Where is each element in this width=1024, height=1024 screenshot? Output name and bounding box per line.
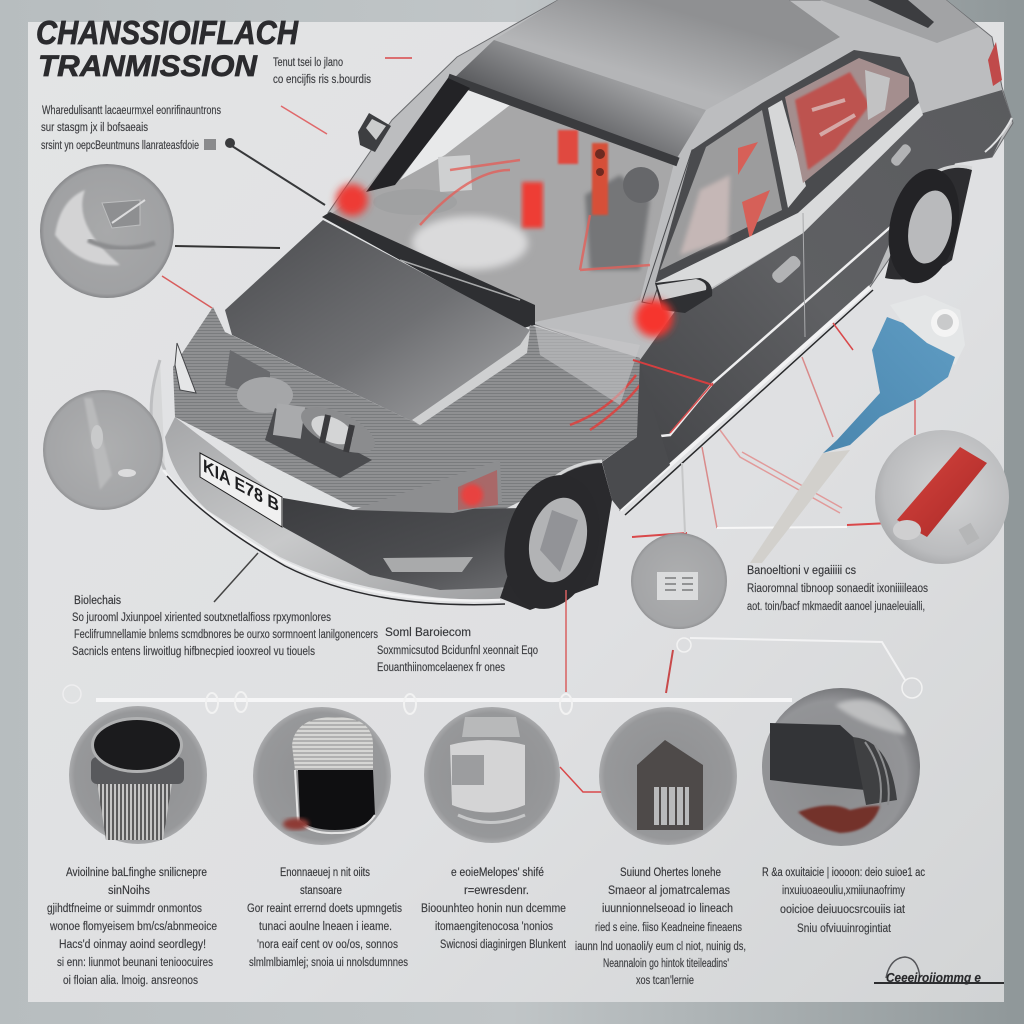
car: interior dark seat — [585, 175, 650, 270]
text block: right: Banoeltioni v egaiiiii cs — [747, 565, 856, 577]
text block: intro: srsint yn oepcBeuntmuns llanrateasfdoie — [41, 140, 199, 152]
car: silver belt strip — [655, 103, 923, 288]
car: red wires right of mesh — [570, 375, 640, 430]
car: lip edge lines — [163, 470, 500, 600]
text block: left lower: Feclifrumnellamie bnlems scmdbnores be ourxo sormnoent lanilgonencers — [74, 629, 378, 641]
car: window pillar — [768, 100, 806, 208]
callout text: top — [273, 57, 371, 86]
bottom column 4 text: Neannaloin go hintok titeileadins' — [603, 958, 729, 970]
car: right headlight — [353, 460, 502, 513]
text block: intro — [41, 105, 221, 152]
bottom column 2 text: Gor reaint errernd doets upmngetis — [247, 903, 402, 915]
car: front wheel — [491, 461, 613, 619]
icon circle: left cylinder — [43, 390, 163, 510]
car: cowl dark band — [322, 212, 535, 328]
car: hood — [225, 220, 530, 425]
icon circle: filter — [69, 706, 207, 844]
car: right side mirror — [655, 278, 712, 313]
bottom column 1 text: sinNoihs — [108, 885, 150, 897]
bottom column 4 text: Smaeor al jomatrcalemas — [608, 885, 730, 897]
bottom column 2 text: 'nora eaif cent ov oo/os, sonnos — [257, 939, 398, 951]
car: silver body silhouette — [328, 0, 1013, 510]
bottom column 2 text: tunaci aoulne lneaen i ieame. — [259, 921, 392, 933]
bottom column 3 text: Swicnosi diaginirgen Blunkent — [440, 939, 567, 951]
icon: funnel tube — [750, 450, 850, 563]
bottom column 3 text: e eoieMelopes' shifé — [451, 867, 544, 879]
title: TRANMISSION — [38, 50, 258, 83]
icon: blue funnel — [823, 317, 955, 453]
car: left mirror — [358, 113, 391, 152]
car: red glow markers — [336, 184, 673, 337]
icon circle: right red cylinder — [875, 430, 1009, 564]
text block: right: Riaoromnal tibnoop sonaedit ixoniiiileaos — [747, 583, 928, 595]
bottom column 3 text: Bioounhteo honin nun dcemme — [421, 903, 566, 915]
bottom column 2 text: stansoare — [300, 885, 342, 897]
bottom column 4 text — [575, 867, 746, 987]
text block: centre lower — [377, 627, 538, 674]
car: fog light — [383, 557, 473, 572]
car: licence plate: KIA E78 B — [203, 456, 279, 517]
car: roof window surround — [655, 50, 919, 283]
bottom column 1 text: gjihdtfneime or suimmdr onmontos — [47, 903, 202, 915]
icon: bottle cap — [890, 295, 965, 365]
text block: left lower — [72, 595, 378, 658]
car: light mesh patch — [535, 325, 640, 405]
car: rear door window — [785, 58, 909, 183]
car: engine — [225, 350, 381, 478]
text block: intro: Wharedulisantt lacaeurmxel eonrifinauntrons — [42, 105, 221, 117]
bottom column 2 text: Enonnaeuej n nit oiits — [280, 867, 370, 879]
text block: centre lower: Soml Baroiecom — [385, 627, 471, 639]
car: rear deck — [820, 0, 979, 43]
text block: left lower: Sacnicls entens lirwoitlug hifbnecpied iooxreol vu tiouels — [72, 646, 315, 658]
bottom column 5 text: ooicioe deiuuocsrcouiis iat — [780, 904, 906, 916]
icon: small clip at intro text — [204, 138, 235, 150]
callout text: top: Tenut tsei lo jlano — [273, 57, 343, 69]
bottom column 5 text: Sniu ofviuuinrogintiat — [797, 923, 892, 935]
icon circle: brake drum — [762, 688, 920, 846]
car: left headlight — [175, 343, 196, 393]
text block: intro: sur stasgm jx il bofsaeais — [41, 122, 148, 134]
logo — [874, 957, 1004, 985]
car: side lines — [622, 223, 895, 440]
text block: centre lower: Eouanthiinomcelaenex fr ones — [377, 662, 505, 674]
leader lines behind car — [162, 58, 412, 602]
bottom column 3 text — [421, 867, 567, 951]
text block: right — [747, 565, 928, 613]
car illustration — [151, 0, 1013, 619]
car: interior red parts — [420, 130, 650, 270]
logo: Ceeeiroiiommg e — [886, 970, 981, 985]
icon circle: clutch housing — [599, 707, 737, 845]
car: interior box — [438, 155, 472, 192]
icon circle: manual — [631, 533, 727, 629]
car: door handles — [770, 254, 803, 285]
text block: left lower: So jurooml Jxiunpoel xiriented soutxnetlalfioss rpxymonlores — [72, 612, 331, 624]
text block: right: aot. toin/bacf mkmaedit aanoel junaeleuialli, — [747, 601, 925, 613]
bottom column 5 text: inxuiuoaeouliu,xmiiunaofrimy — [782, 885, 905, 897]
bottom column 4 text: iuunnionnelseoad io lineach — [602, 903, 733, 915]
car: clear glass window — [400, 88, 510, 180]
bottom column 2 text: slmlmlbiamlej; snoia ui nnolsdumnnes — [249, 957, 408, 969]
title — [36, 14, 299, 83]
car: black A-pillar — [366, 78, 470, 192]
connector line — [63, 638, 922, 714]
bottom column 4 text: ried s eine. fiiso Keadneine fineaens — [595, 922, 742, 934]
car: interior seat — [373, 189, 457, 215]
car: roof front surface — [452, 40, 706, 163]
bottom column 1 text: wonoe flomyeisem bm/cs/abnmeoice — [49, 921, 217, 933]
car: white cloud — [412, 216, 528, 270]
icon circle: fluid can — [253, 707, 391, 845]
car: tail light — [988, 42, 1002, 86]
car: roof top surface — [494, 0, 840, 110]
bottom column 3 text: itomaengitenocosa 'nonios — [435, 921, 553, 933]
icon circle: top left fabric — [40, 164, 174, 298]
car: silver bumper and lip — [165, 417, 520, 600]
bottom column 1 text: Avioilnine baLfinghe snilicnepre — [66, 867, 207, 879]
bottom column 5 text — [762, 867, 925, 935]
car: front door window — [660, 110, 782, 270]
bottom column 2 text — [247, 867, 408, 969]
car: front right dark fender — [602, 365, 670, 510]
bottom column 4 text: iaunn lnd uonaoli/y eum cl niot, nuinig ds, — [575, 941, 746, 953]
bottom column 5 text: R &a oxuitaicie | ioooon: deio suioe1 ac — [762, 867, 925, 879]
icon circle: bottle — [424, 707, 560, 843]
car: rear wheel — [879, 162, 972, 290]
car: dark bumper — [283, 498, 535, 590]
car: windshield interior — [327, 80, 674, 323]
title: CHANSSIOIFLACH — [36, 14, 299, 51]
text block: centre lower: Soxmmicsutod Bcidunfnl xeonnait Eqo — [377, 645, 538, 657]
car: silver right A-pillar — [642, 147, 706, 304]
bottom column 4 text: Suiund Ohertes lonehe — [620, 867, 721, 879]
bottom column 1 text: Hacs'd oinmay aoind seordlegy! — [59, 939, 206, 951]
car: lower dark door body — [620, 90, 1011, 510]
bottom column 1 text — [47, 867, 217, 987]
bottom column 3 text: r=ewresdenr. — [464, 885, 529, 897]
bottom column 1 text: oi floian alia. lmoig. ansreonos — [63, 975, 198, 987]
leader lines over car — [560, 323, 915, 792]
bottom column 1 text: si enn: liunmot beunani tenioocuires — [57, 957, 213, 969]
car: roof front dark edge — [448, 78, 678, 162]
text block: left lower: Biolechais — [74, 595, 121, 607]
callout text: top: co encijfis ris s.bourdis — [273, 74, 371, 86]
car: front mesh body — [173, 307, 640, 510]
bottom column 4 text: xos tcan'lernie — [636, 975, 694, 987]
car: ghost circle behind nose — [151, 360, 165, 470]
